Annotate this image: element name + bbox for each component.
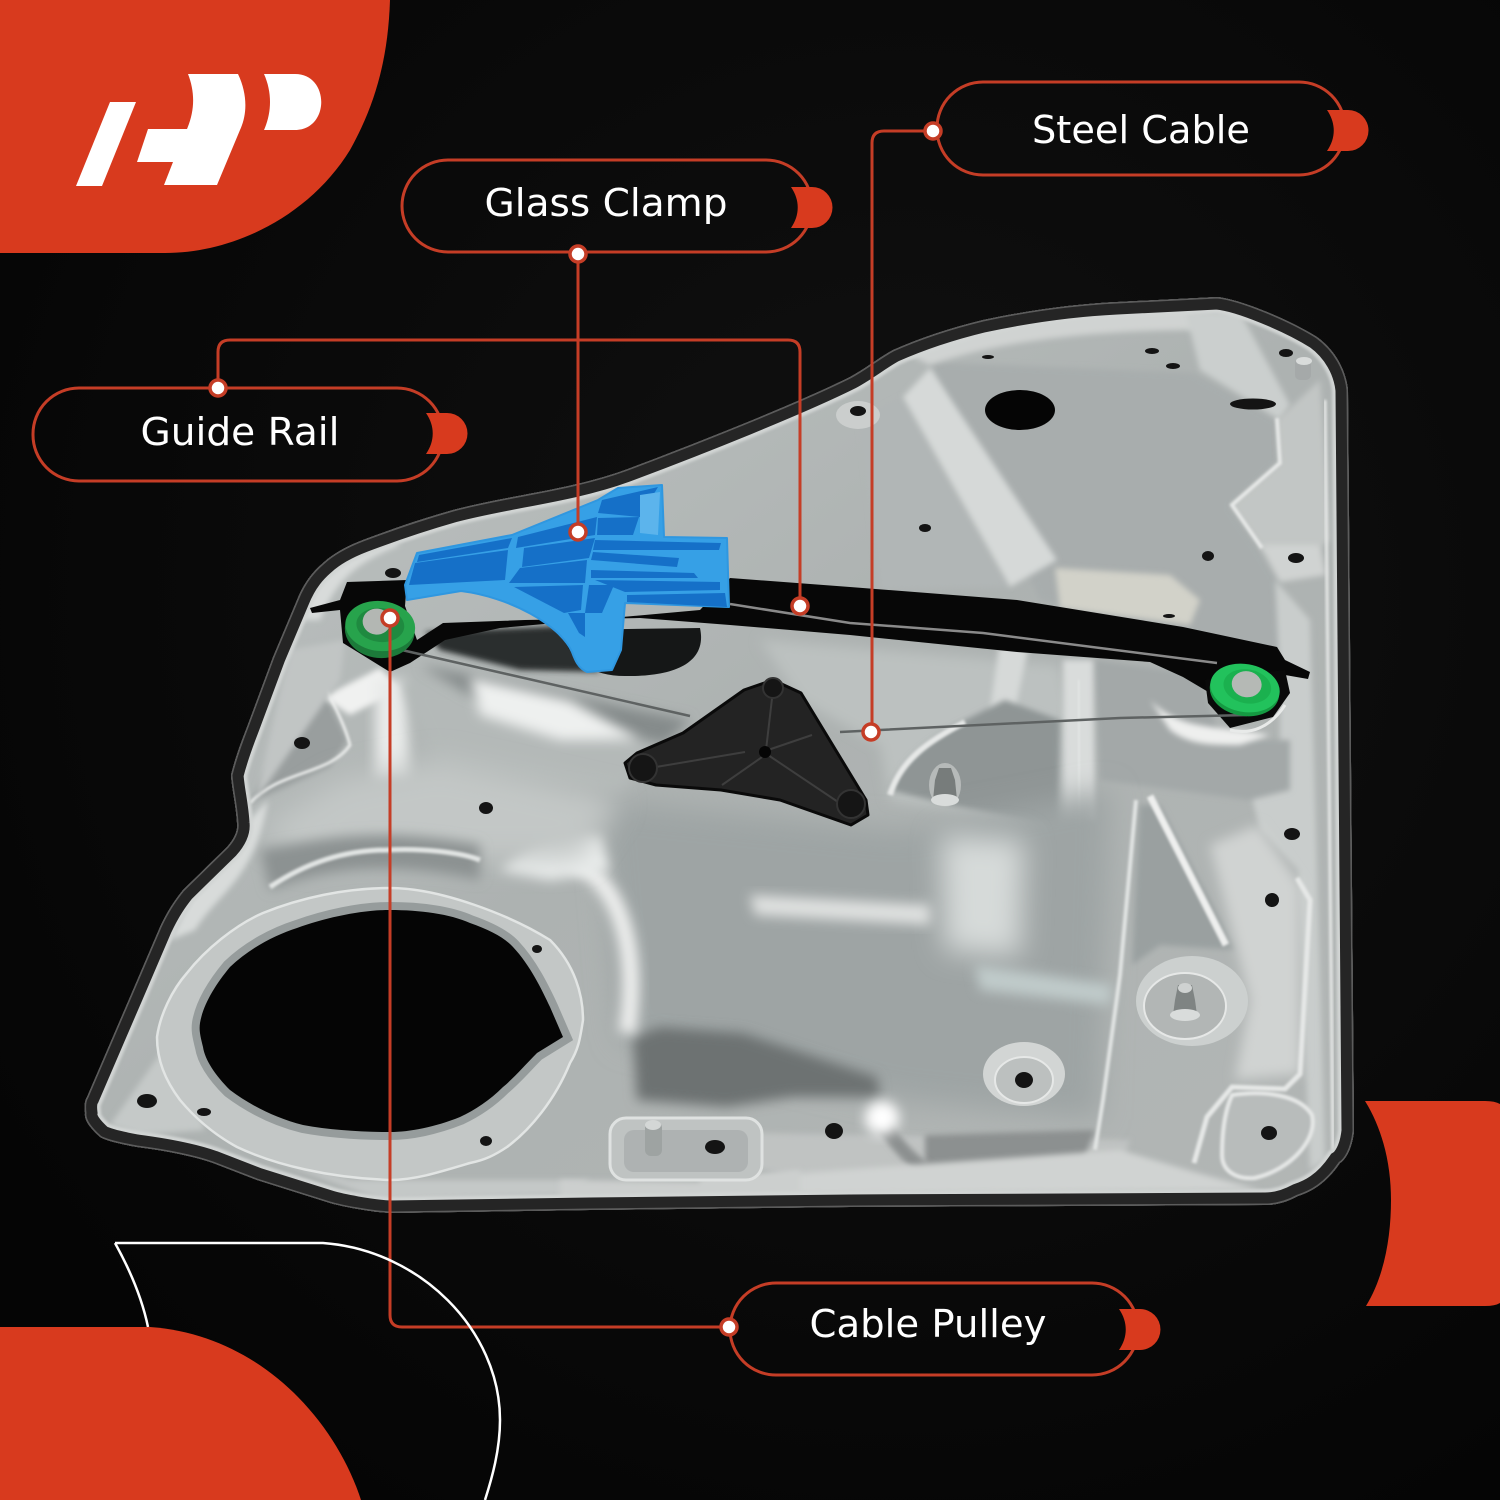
corner shape bottom-left	[0, 1327, 361, 1500]
logo	[76, 74, 321, 186]
callout: Cable Pulley: Cable Pulley	[810, 1302, 1046, 1346]
rim and gasket	[85, 297, 1354, 1213]
callout: Glass Clamp	[402, 160, 832, 252]
callout: Guide Rail: Guide Rail	[140, 410, 340, 454]
corner shape top-left	[0, 0, 390, 253]
side shape right	[1365, 1101, 1500, 1306]
guide rail	[310, 578, 1310, 732]
left recess	[252, 700, 346, 801]
connector dots	[210, 123, 941, 1335]
cable pulley left	[342, 597, 418, 661]
connector lines	[218, 131, 933, 1327]
mounting holes	[137, 348, 1304, 1154]
studs and bolts	[929, 357, 1312, 1021]
rear opening	[560, 628, 701, 676]
dished holes	[836, 401, 1248, 1106]
middle field	[600, 790, 1110, 1120]
stud plate	[610, 1118, 762, 1180]
bottom plate	[562, 1174, 774, 1195]
motor mount cover	[625, 678, 868, 825]
glass clamp	[405, 485, 729, 672]
callout: Steel Cable: Steel Cable	[1032, 108, 1250, 152]
callout: Steel Cable	[937, 82, 1368, 175]
upper plateau	[936, 366, 1046, 426]
callout: Glass Clamp: Glass Clamp	[484, 181, 728, 225]
speaker opening	[157, 888, 583, 1180]
outline shape bottom-left	[115, 1243, 500, 1500]
below rail	[1095, 660, 1290, 800]
under-arm shadow	[425, 626, 600, 672]
triangular rib	[1132, 805, 1236, 965]
lower-left corner	[112, 1057, 204, 1134]
callout: Guide Rail	[33, 388, 467, 481]
upper hole	[985, 390, 1055, 430]
steel cable	[393, 648, 1247, 732]
steel sheet	[85, 297, 1354, 1213]
cable pulley right	[1206, 658, 1284, 722]
callout: Cable Pulley	[730, 1283, 1160, 1375]
